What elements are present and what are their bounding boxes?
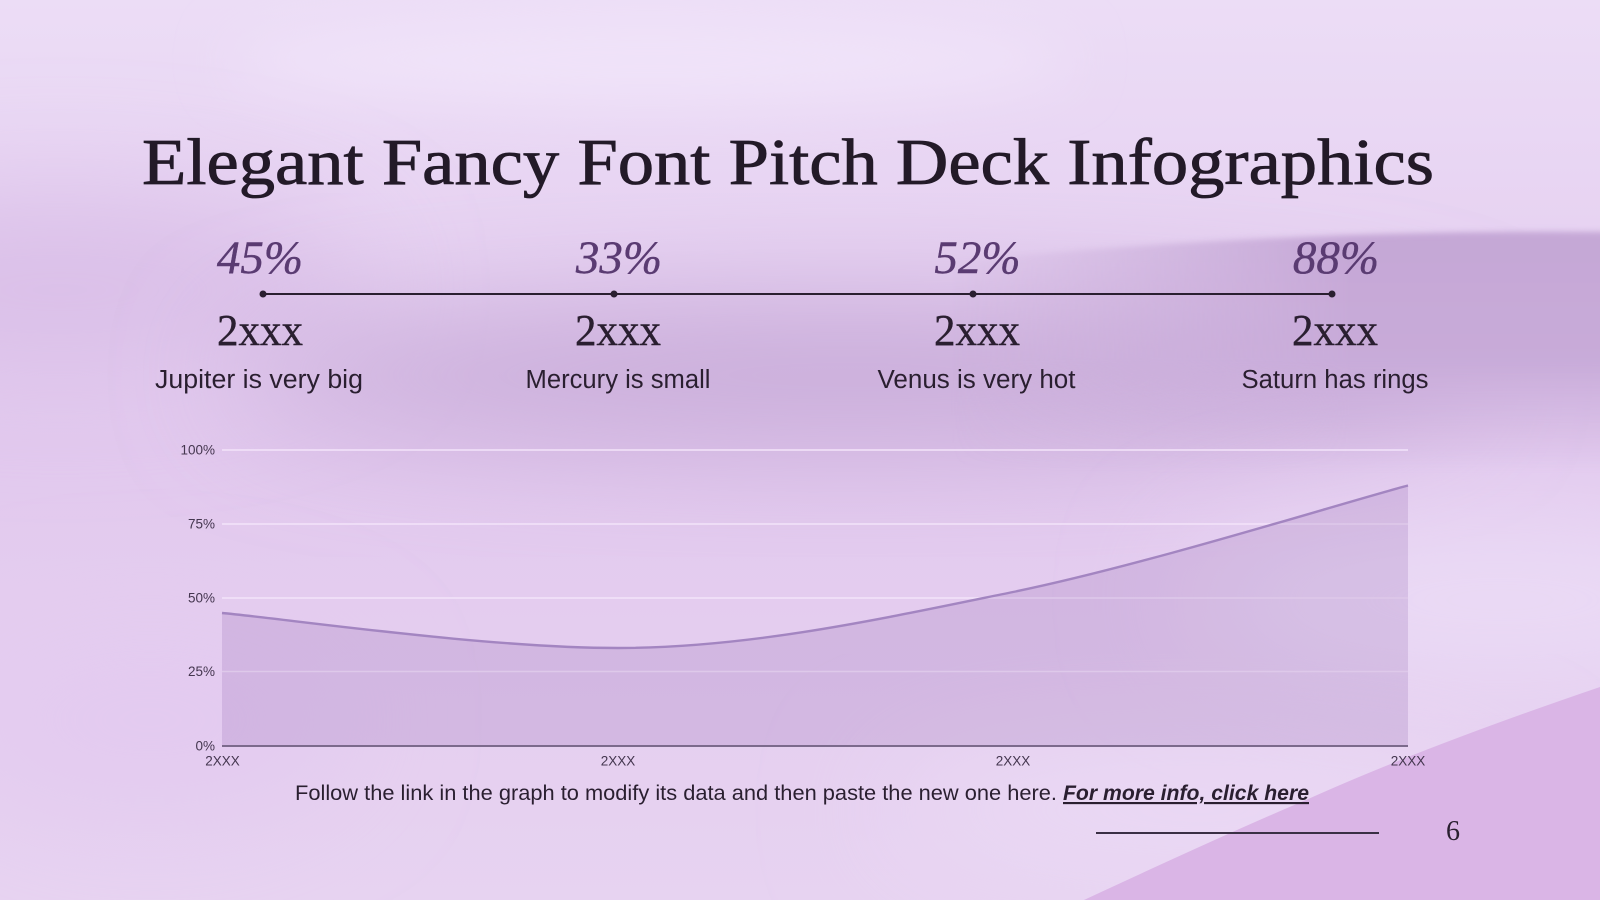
milestone: Mercury xyxy=(526,232,710,394)
milestone: Venus: 52% xyxy=(934,232,1021,284)
y axis labels: 0% xyxy=(195,738,215,754)
background: lower-right wedge xyxy=(1084,687,1600,900)
chart curve line xyxy=(222,486,1408,648)
y axis labels: 50% xyxy=(188,590,215,606)
milestone: Venus: 2xxx xyxy=(934,306,1020,355)
timeline xyxy=(260,290,1336,298)
chart x axis xyxy=(222,745,1408,747)
page number: 6 xyxy=(1446,816,1460,847)
milestone: Jupiter: Jupiter is very big xyxy=(155,366,363,394)
caption: Follow the link in the graph to modify its data and then paste the new one here. xyxy=(295,781,1057,805)
milestone: Jupiter: 2xxx xyxy=(217,306,303,355)
milestone: Saturn: 88% xyxy=(1293,232,1379,284)
title: Elegant Fancy Font Pitch Deck Infographics xyxy=(142,126,1434,199)
y axis labels: 100% xyxy=(180,442,215,458)
milestone: Venus: Venus is very hot xyxy=(878,366,1076,394)
caption link: For more info, click here xyxy=(1063,781,1309,805)
chart gridlines xyxy=(222,450,1408,672)
area chart xyxy=(180,442,1425,768)
x axis labels: 2XXX xyxy=(205,754,240,768)
milestone: Mercury: 33% xyxy=(575,232,662,284)
milestone: Mercury: Mercury is small xyxy=(526,366,710,394)
background: soft lilac gradient xyxy=(0,0,1600,720)
milestone: Jupiter: 45% xyxy=(217,232,303,284)
milestone: Saturn: Saturn has rings xyxy=(1242,366,1428,394)
x axis labels xyxy=(205,754,1425,768)
x axis labels: 2XXX xyxy=(1391,754,1425,768)
milestone: Saturn xyxy=(1242,232,1428,394)
milestone: Saturn: 2xxx xyxy=(1292,306,1378,355)
timeline connector line xyxy=(263,293,1332,295)
footer rule xyxy=(1096,832,1379,834)
milestone: Jupiter xyxy=(155,232,363,394)
milestone: Mercury: 2xxx xyxy=(575,306,661,355)
x axis labels: 2XXX xyxy=(996,754,1030,768)
timeline dots xyxy=(260,290,1336,298)
x axis labels: 2XXX xyxy=(601,754,635,768)
y axis labels xyxy=(180,442,215,754)
chart area fill xyxy=(222,486,1408,746)
milestone: Venus xyxy=(878,232,1076,394)
y axis labels: 25% xyxy=(188,664,215,679)
y axis labels: 75% xyxy=(188,516,215,532)
